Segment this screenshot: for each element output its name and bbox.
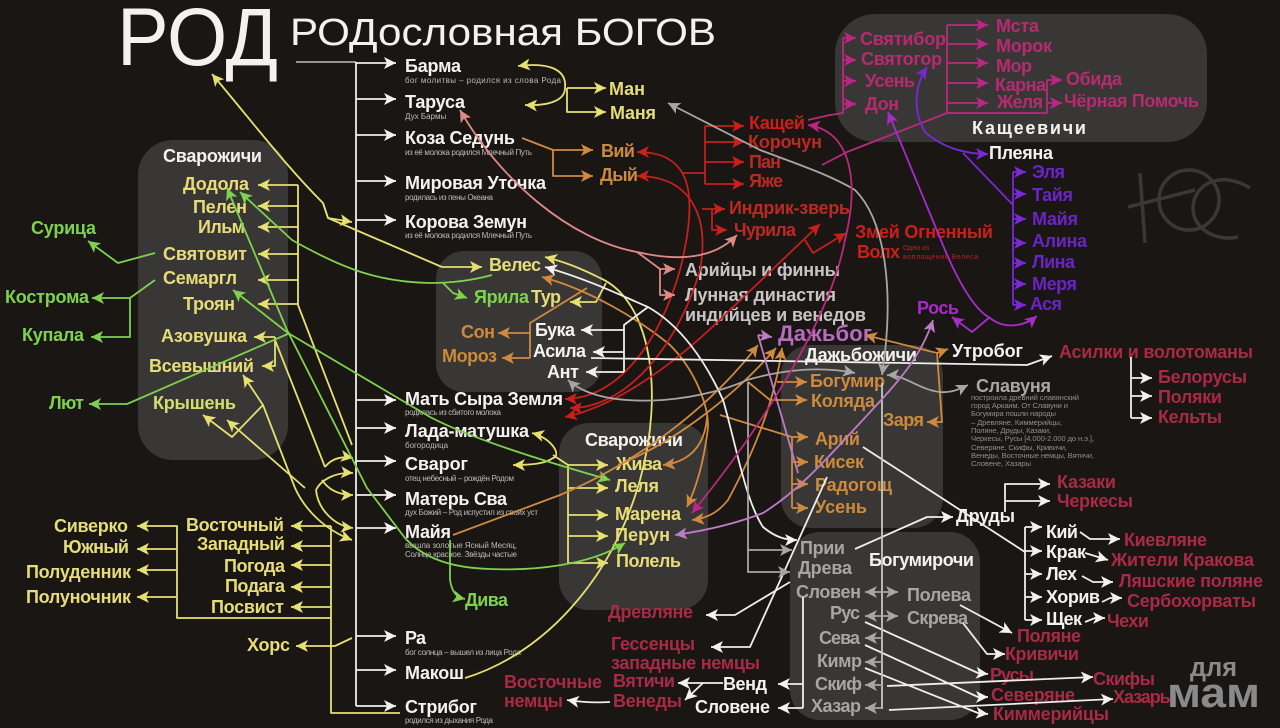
text block: primary deities list: Солнце красное. Звёзды частые — [405, 550, 518, 559]
watermark: мам — [1167, 669, 1260, 716]
text block: Druids and descendants: Друды — [956, 506, 1015, 526]
text block: primary deities list: из её молока родился Млечный Путь — [405, 231, 532, 240]
text block: Bogumirochi names: Словен — [796, 582, 861, 602]
text block: left Svarozhichi names: Семаргл — [163, 268, 237, 288]
icon: author monogram — [1128, 170, 1250, 243]
text block: Kashcheevichi names: Дон — [865, 94, 899, 114]
text block: Pleyana and daughters: Лина — [1032, 252, 1076, 272]
text block: Pleyana and daughters: Эля — [1032, 162, 1065, 182]
text block: Veles group names: Асила — [533, 341, 587, 361]
text block: winds: Полуночник — [26, 587, 132, 607]
text block: Asilki and peoples — [1059, 342, 1253, 427]
text block: Man, Vii, Koshchei line: Корочун — [748, 132, 822, 152]
text block: Man, Vii, Koshchei line: Одно из — [903, 245, 929, 252]
text block: Druids and descendants: Кий — [1046, 522, 1078, 542]
text block: Man, Vii, Koshchei line: Маня — [610, 103, 656, 123]
text block: winds: Сиверко — [54, 516, 128, 536]
text block: Man, Vii, Koshchei line: Лунная династия — [685, 285, 836, 305]
text block: western peoples: Венд — [723, 674, 768, 694]
text block: western peoples: Венеды — [613, 691, 682, 711]
text block: Bogumirochi names: Богумирочи — [869, 550, 974, 570]
text block: winds: Южный — [63, 537, 129, 557]
text block: left Svarozhichi names: Святовит — [163, 244, 247, 264]
text block: Druids and descendants: Киевляне — [1124, 530, 1207, 550]
text block: Slavunya description: город Аркаим. От Славуни и — [971, 401, 1068, 410]
arrows: purple connectors to Ros — [888, 112, 1037, 332]
text block: primary deities list: Лада-матушка — [405, 421, 530, 441]
text block: green children: Сурица — [31, 218, 97, 238]
text block: middle Svarozhichi names: Жива — [615, 454, 663, 474]
text block: Druids and descendants: Ляшские поляне — [1119, 571, 1263, 591]
text block: primary deities list: Корова Земун — [405, 212, 527, 232]
text block: Bogumirochi names: Рус — [830, 603, 860, 623]
text block: green children: Лют — [49, 393, 84, 413]
text block: Druids and descendants: Хазары — [1113, 687, 1175, 707]
text block: Bogumirochi names: Сева — [819, 628, 861, 648]
panel: Bogumirochi — [790, 532, 980, 720]
text block: primary deities list: из её молока родился Млечный Путь — [405, 148, 532, 157]
text block: Druids and descendants: Черкесы — [1057, 491, 1133, 511]
arrows: red connectors — [565, 126, 846, 417]
text block: western peoples — [504, 602, 770, 717]
text block: Pleyana and daughters: Алина — [1032, 231, 1088, 251]
text block: left Svarozhichi names: Азовушка — [161, 326, 248, 346]
text block: Man, Vii, Koshchei line: воплощений Велеса — [903, 253, 978, 261]
text block: Bogumirochi names: Древа — [798, 558, 853, 578]
arrows: pink connectors — [692, 25, 1062, 513]
text block: western peoples: немцы — [504, 691, 563, 711]
text block: primary deities list — [405, 56, 563, 725]
text block: Druids and descendants: Жители Кракова — [1110, 550, 1255, 570]
text block: Druids and descendants: Скифы — [1093, 669, 1155, 689]
text block: Slavunya description: построила древний славянский — [971, 393, 1079, 402]
text block: left Svarozhichi names: Сварожичи — [163, 146, 262, 166]
text block: western peoples: Древляне — [608, 602, 693, 622]
text block: winds — [26, 515, 290, 655]
text block: primary deities list: Макош — [405, 663, 464, 683]
text block: Veles group names: Тур — [531, 287, 561, 307]
text block: winds: Подага — [225, 576, 286, 596]
text block: Druids and descendants: Лех — [1046, 564, 1077, 584]
text block: Bogumirochi names: Хазар — [811, 696, 861, 716]
panel: Dazhbozhichi — [781, 345, 943, 528]
text block: Dazhbog group: Арий — [815, 429, 860, 449]
text block: Dazhbog group: Дажьбожичи — [805, 345, 917, 365]
text block: Pleyana and daughters: Майя — [1032, 209, 1078, 229]
arrows: violet connectors — [917, 67, 1026, 305]
arrows: salmon connectors to lunar dynasty — [460, 110, 737, 295]
text block: left Svarozhichi names: Пелен — [193, 197, 247, 217]
text block: Veles group names: Сон — [461, 322, 495, 342]
text block: primary deities list: Мать Сыра Земля — [405, 389, 563, 409]
text block: primary deities list: богородица — [405, 441, 449, 450]
text block: Pleyana and daughters: Ася — [1030, 294, 1062, 314]
text block: Slavunya description: Поляне, Друды, Казаки, — [971, 426, 1051, 435]
text block: green children — [5, 218, 509, 610]
text block: Asilki and peoples: Поляки — [1158, 387, 1222, 407]
text block: Druids and descendants: Кривичи — [1005, 644, 1079, 664]
text block: Pleyana and daughters: Рось — [917, 298, 959, 318]
text block: western peoples: Вятичи — [613, 671, 675, 691]
text block: Druids and descendants: Русы — [990, 665, 1034, 685]
text block: Kashcheevichi names: Чёрная Помочь — [1064, 91, 1199, 111]
text block: left Svarozhichi names — [149, 146, 262, 413]
arrows: main trunk from Rod to primary deities — [296, 62, 396, 706]
text block: Kashcheevichi names — [860, 16, 1199, 138]
text block: Druids and descendants: Северяне — [991, 685, 1075, 705]
text block: western peoples: Словене — [695, 697, 770, 717]
text block: primary deities list: Майя — [405, 522, 451, 542]
text block: middle Svarozhichi names: Сварожичи — [585, 430, 683, 450]
text block: Asilki and peoples: Кельты — [1158, 407, 1222, 427]
text block: Dazhbog group — [778, 321, 1024, 517]
text block: Kashcheevichi names: Морок — [996, 36, 1053, 56]
text block: Druids and descendants: Казаки — [1057, 472, 1116, 492]
text block: primary deities list: Стрибог — [405, 697, 478, 717]
text block: Slavunya description: Венеды, Восточные немцы, Вятичи, — [971, 451, 1094, 460]
subtitle: РОДословная БОГОВ — [290, 12, 716, 54]
text block: Dazhbog group: Усень — [815, 497, 867, 517]
text block: Druids and descendants: Чехи — [1107, 611, 1149, 631]
text block: Asilki and peoples: Асилки и волотоманы — [1059, 342, 1253, 362]
text block: primary deities list: вышла золотые Ясный Месяц, — [405, 541, 517, 550]
arrows: green connectors — [88, 188, 625, 599]
panel: middle Svarozhichi — [559, 423, 708, 610]
text block: Man, Vii, Koshchei line: Индрик-зверь — [729, 198, 850, 218]
watermark: для — [1190, 652, 1237, 682]
text block: Veles group names: Мороз — [442, 346, 497, 366]
text block: Dazhbog group: Радогощ — [815, 475, 893, 495]
text block: Slavunya description: – Древляне, Киммерийцы, — [971, 418, 1062, 427]
text block: Bogumirochi names: Прии — [800, 538, 845, 558]
text block: Kashcheevichi names: Святогор — [861, 49, 942, 69]
text block: Kashcheevichi names: Мор — [996, 56, 1032, 76]
arrows: yellow connectors — [137, 65, 652, 713]
text block: primary deities list: Матерь Сва — [405, 489, 508, 509]
text block: Druids and descendants: Киммерийцы — [993, 704, 1109, 724]
text block: Man, Vii, Koshchei line: Кащей — [749, 113, 805, 133]
text block: Slavunya description: Черкесы, Русы [4.000-2.000 до н.э.], — [971, 434, 1094, 443]
arrows: white connectors — [545, 267, 1152, 714]
text block: Man, Vii, Koshchei line: Пан — [749, 152, 781, 172]
text block: western peoples: западные немцы — [611, 653, 760, 673]
watermark — [1167, 652, 1260, 716]
text block: primary deities list: родилась из пены Океана — [405, 193, 494, 202]
text block: primary deities list: отец небесный – рождён Родом — [405, 474, 514, 483]
text block: Slavunya description: Богумира пошли народы — [971, 409, 1056, 418]
text block: Veles group names: Велес — [489, 255, 541, 275]
text block: Man, Vii, Koshchei line: Чурила — [734, 220, 797, 240]
text block: Man, Vii, Koshchei line: индийцев и венедов — [685, 305, 866, 325]
text block: Veles group names: Ант — [547, 362, 579, 382]
text block: Pleyana and daughters: Меря — [1032, 274, 1077, 294]
text block: winds: Погода — [224, 556, 286, 576]
text block: Druids and descendants: Поляне — [1017, 626, 1081, 646]
text block: green children: Кострома — [5, 287, 90, 307]
text block: primary deities list: дух Божий – Род испустил из своих уст — [405, 508, 538, 517]
text block: Dazhbog group: Богумир — [810, 371, 885, 391]
text block: green children: Дива — [465, 590, 509, 610]
text block: primary deities list: бог молитвы – родился из слова Рода — [405, 76, 562, 85]
text block: middle Svarozhichi names: Полель — [616, 551, 681, 571]
text block: Druids and descendants: Сербохорваты — [1127, 591, 1256, 611]
text block: Kashcheevichi names: Мста — [996, 16, 1040, 36]
text block: Dazhbog group: Коляда — [811, 391, 876, 411]
text block: left Svarozhichi names: Крышень — [153, 393, 236, 413]
text block: Man, Vii, Koshchei line: Ман — [609, 79, 645, 99]
text block: Bogumirochi names — [796, 538, 974, 716]
panel: left Svarozhichi — [138, 140, 288, 460]
text block: primary deities list: Ра — [405, 628, 427, 648]
text block: winds: Западный — [197, 534, 285, 554]
panel: Veles group — [436, 251, 602, 392]
text block: Kashcheevichi names: Обида — [1066, 69, 1123, 89]
text block: Pleyana and daughters: Тайя — [1032, 185, 1073, 205]
text block: winds: Посвист — [211, 597, 284, 617]
text block: left Svarozhichi names: Ильм — [198, 217, 245, 237]
text block: primary deities list: бог солнца – вышел из лица Рода — [405, 648, 522, 657]
text block: green children: Купала — [22, 325, 85, 345]
text block: winds: Хорс — [247, 635, 290, 655]
text block: western peoples: Гессенцы — [611, 634, 695, 654]
text block: Druids and descendants: Щек — [1046, 609, 1083, 629]
text block: Slavunya description — [971, 376, 1094, 468]
text block: Kashcheevichi names: Карна — [995, 75, 1047, 95]
text block: primary deities list: Дух Бармы — [405, 112, 446, 121]
text block: Pleyana and daughters — [917, 143, 1088, 318]
panel: Kashcheevichi — [835, 14, 1207, 142]
text block: Veles group names: Ярила — [474, 287, 530, 307]
text block: Bogumirochi names: Полева — [907, 585, 972, 605]
arrows: orange connectors — [453, 138, 948, 535]
text block: Dazhbog group: Утробог — [952, 341, 1024, 361]
text block: left Svarozhichi names: Троян — [183, 294, 235, 314]
text block: middle Svarozhichi names — [585, 430, 683, 571]
text block: Man, Vii, Koshchei line — [600, 79, 993, 325]
arrows: grey connectors — [568, 103, 968, 709]
text block: winds: Полуденник — [26, 562, 132, 582]
text block: Slavunya description: Славуня — [976, 376, 1051, 396]
text block: winds: Восточный — [186, 515, 284, 535]
text block: Bogumirochi names: Скиф — [815, 674, 862, 694]
text block: Man, Vii, Koshchei line: Волх — [857, 242, 900, 262]
text block: primary deities list: Барма — [405, 56, 462, 76]
text block: western peoples: Восточные — [504, 672, 602, 692]
text block: Dazhbog group: Кисек — [814, 452, 865, 472]
text block: middle Svarozhichi names: Леля — [615, 476, 659, 496]
text block: Veles group names: Бука — [535, 320, 576, 340]
text block: left Svarozhichi names: Всевышний — [149, 356, 254, 376]
text block: primary deities list: Мировая Уточка — [405, 173, 547, 193]
text block: Dazhbog group: Заря — [883, 410, 924, 430]
text block: left Svarozhichi names: Додола — [183, 174, 250, 194]
text block: Man, Vii, Koshchei line: Дый — [600, 165, 638, 185]
text block: Bogumirochi names: Скрева — [907, 608, 969, 628]
text block: middle Svarozhichi names: Перун — [615, 525, 670, 545]
text block: Bogumirochi names: Кимр — [817, 651, 862, 671]
text block: Druids and descendants — [956, 472, 1263, 724]
text block: primary deities list: родилась из сбитого молока — [405, 408, 502, 417]
text block: Druids and descendants: Хорив — [1046, 587, 1100, 607]
text block: Man, Vii, Koshchei line: Змей Огненный — [855, 222, 993, 242]
text block: Man, Vii, Koshchei line: Арийцы и финны — [685, 260, 840, 280]
text block: Kashcheevichi names: Желя — [996, 92, 1043, 112]
text block: middle Svarozhichi names: Марена — [615, 504, 682, 524]
text block: primary deities list: родился из дыхания Рода — [405, 716, 494, 725]
text block: primary deities list: Коза Седунь — [405, 128, 515, 148]
text block: primary deities list: Сварог — [405, 454, 468, 474]
text block: Slavunya description: Северяне, Скифы, Кривичи, — [971, 443, 1067, 452]
text block: Kashcheevichi names: Усень — [865, 71, 915, 91]
text block: Druids and descendants: Крак — [1046, 542, 1087, 562]
text block: primary deities list: Таруса — [405, 92, 466, 112]
text block: Veles group names — [442, 255, 587, 382]
text block: Kashcheevichi names: Кащеевичи — [972, 118, 1086, 138]
text block: Pleyana and daughters: Плеяна — [989, 143, 1054, 163]
text block: Asilki and peoples: Белорусы — [1158, 367, 1247, 387]
text block: Dazhbog group: Дажьбог — [778, 321, 872, 346]
text block: Man, Vii, Koshchei line: Вий — [601, 141, 635, 161]
text block: Man, Vii, Koshchei line: Яже — [749, 171, 783, 191]
text block: Kashcheevichi names: Святибор — [860, 29, 946, 49]
text block: Slavunya description: Словене, Хазары — [971, 459, 1031, 468]
arrows: lilac connectors — [675, 320, 933, 535]
